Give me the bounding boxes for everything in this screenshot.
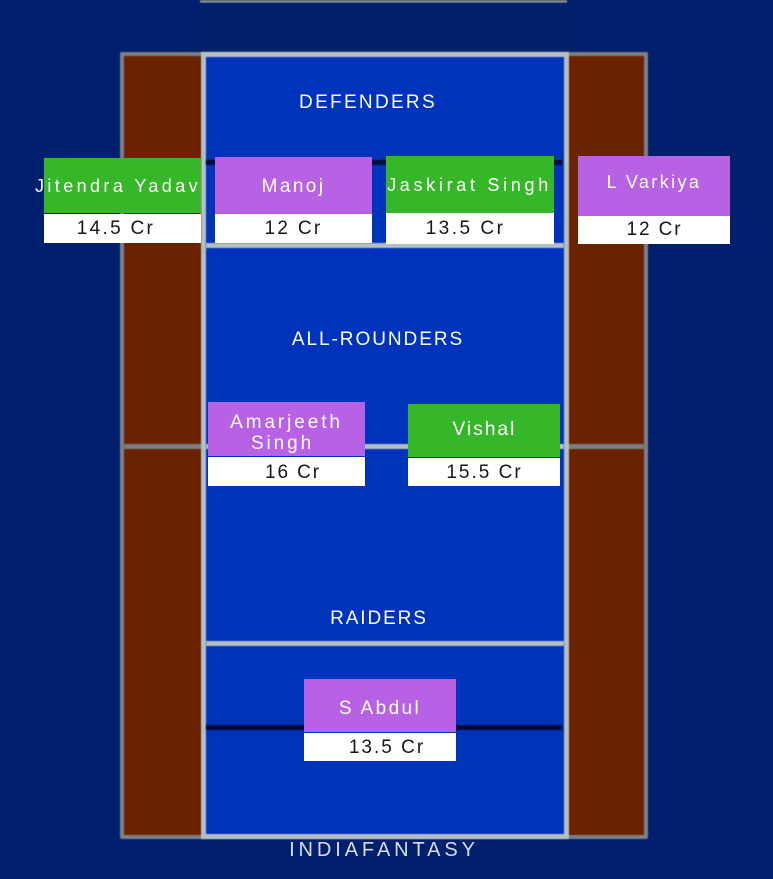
court line upper xyxy=(206,243,564,248)
court line middle xyxy=(206,444,564,449)
footer brand: INDIAFANTASY xyxy=(289,839,479,861)
price: 14.5 Cr xyxy=(77,218,155,239)
name xyxy=(386,156,554,213)
name xyxy=(408,404,560,457)
name xyxy=(208,402,365,456)
name: Jaskirat Singh xyxy=(387,175,552,195)
name xyxy=(44,158,201,213)
price: 16 Cr xyxy=(265,462,321,483)
price xyxy=(408,458,560,486)
side divider left xyxy=(124,444,202,449)
name: Amarjeeth xyxy=(230,412,343,433)
price: 13.5 Cr xyxy=(426,218,505,239)
name: Jitendra Yadav xyxy=(35,176,201,196)
card: Jaskirat Singh xyxy=(386,156,554,244)
name xyxy=(304,679,456,732)
outer court frame xyxy=(120,52,648,839)
court line lower xyxy=(206,641,564,646)
card: Amarjeeth Singh xyxy=(208,402,365,486)
black line lower xyxy=(206,725,562,730)
name: Vishal xyxy=(452,419,516,440)
black line upper xyxy=(206,160,562,165)
name: Singh xyxy=(251,433,314,454)
heading: defenders: DEFENDERS xyxy=(299,92,437,113)
card: L Varkiya xyxy=(578,156,730,244)
card: S Abdul xyxy=(304,679,456,761)
card: Manoj xyxy=(215,157,372,243)
price: 15.5 Cr xyxy=(446,462,523,483)
price: 12 Cr xyxy=(627,219,682,240)
price xyxy=(304,733,456,761)
side divider right xyxy=(566,444,644,449)
card: Vishal xyxy=(408,404,560,486)
heading: raiders: RAIDERS xyxy=(330,608,428,629)
name xyxy=(578,156,730,216)
name: S Abdul xyxy=(339,698,421,719)
price xyxy=(208,457,365,486)
name: Manoj xyxy=(262,176,325,197)
heading: all-rounders: ALL-ROUNDERS xyxy=(292,329,464,350)
central blue court xyxy=(201,52,569,839)
top court edge xyxy=(200,0,567,3)
price: 13.5 Cr xyxy=(349,737,425,758)
price xyxy=(578,216,730,244)
price xyxy=(44,214,201,243)
upper court shadow band xyxy=(200,3,567,52)
price xyxy=(215,214,372,243)
name xyxy=(215,157,372,214)
price xyxy=(386,213,554,244)
name: L Varkiya xyxy=(607,172,701,192)
price: 12 Cr xyxy=(265,218,322,239)
card: Jitendra Yadav xyxy=(35,158,201,243)
